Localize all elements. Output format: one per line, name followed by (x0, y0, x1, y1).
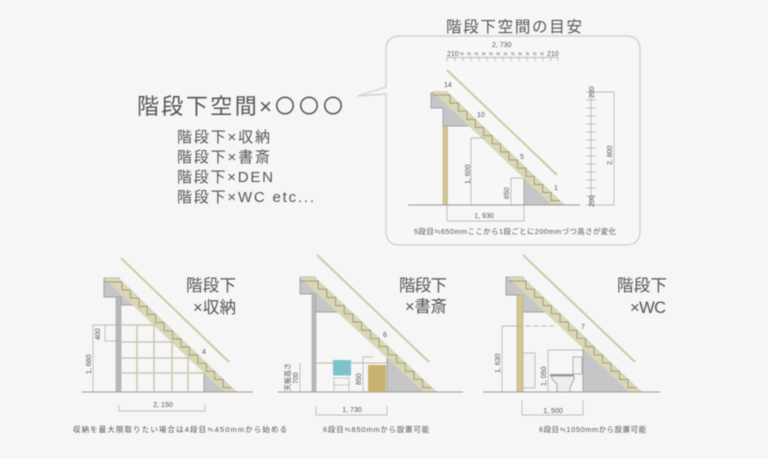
step numbers: 10 (477, 112, 485, 119)
desk and chair (316, 360, 387, 392)
step numbers: 5 (520, 154, 524, 161)
height dimensions: 1, 630 (495, 353, 502, 373)
step number: 7 (581, 324, 585, 331)
stair section (82, 258, 253, 392)
main heading: 〇〇〇 (275, 95, 343, 118)
desk height dimensions: 700 (293, 372, 300, 384)
width dimension (316, 406, 387, 415)
panel title: 階段下空間の目安 (446, 18, 582, 36)
width dimension 2,730 (447, 42, 559, 61)
stair section (483, 255, 660, 392)
step numbers (444, 82, 558, 192)
study heading (399, 276, 447, 316)
clearance dimensions (465, 138, 523, 205)
list of under-stair uses (177, 129, 314, 206)
panel: study under stairs (278, 255, 463, 434)
width dimension: 2, 150 (153, 402, 173, 409)
width dimension: 1, 500 (543, 408, 563, 415)
study caption: 6段目≒850mmから設置可能 (323, 425, 430, 434)
step numbers: 1 (554, 185, 558, 192)
width dimension (119, 402, 205, 411)
WC heading: ×WC (630, 299, 666, 317)
step numbers: 14 (444, 82, 452, 89)
storage heading: ×収納 (193, 298, 236, 317)
stair section (278, 255, 463, 392)
height dimension 2,800: 200 (589, 195, 596, 207)
height dimension 2,800: 2, 800 (607, 145, 614, 165)
list of under-stair uses: 階段下×WC etc... (177, 189, 314, 206)
storage caption: 収納を最大限取りたい場合は4段目≒450mmから始める (73, 425, 287, 434)
WC heading: 階段下 (617, 276, 667, 295)
list of under-stair uses: 階段下×書斎 (177, 149, 270, 166)
width dimension 2,730: 210 (547, 51, 559, 58)
step number: 4 (202, 349, 206, 356)
height dimension 2,800: 200 (589, 86, 596, 98)
width dimension: 1, 730 (342, 407, 362, 414)
height dimension 2,800 (586, 86, 614, 207)
list of under-stair uses: 階段下×収納 (177, 129, 270, 146)
storage grid shelves (121, 325, 204, 392)
study heading: 階段下 (399, 276, 447, 295)
study heading: ×書斎 (405, 297, 447, 316)
width dimension 2,730: 2, 730 (492, 42, 512, 49)
width dimension 2,730: 210 (447, 51, 459, 58)
storage heading: 階段下 (186, 276, 236, 295)
storage heading (186, 276, 236, 317)
toilet and sink (523, 353, 582, 392)
height dimensions: 1, 050 (541, 366, 548, 386)
WC heading (617, 276, 667, 317)
WC caption: 6段目≒1050mmから設置可能 (539, 425, 647, 434)
panel: storage under stairs (73, 258, 287, 434)
clearance dimensions: 650 (504, 187, 511, 199)
guide caption: 5段目≒650mmここから1段ごとに200mmづつ高さが変化 (414, 227, 617, 236)
height dimensions (86, 325, 121, 392)
step number: 6 (383, 332, 387, 339)
stair section drawing (408, 70, 580, 205)
desk height dimensions: 天板高さ (283, 363, 292, 391)
desk height dimensions (283, 357, 373, 392)
main heading: 階段下空間× (137, 94, 272, 119)
width dimension 2,730: ≈≈≈≈≈≈≈≈≈≈≈≈ (460, 51, 544, 58)
width dimension 1,930 (447, 205, 524, 221)
clearance dimensions: 1, 600 (465, 164, 472, 184)
width dimension 1,930: 1, 930 (474, 213, 494, 220)
list of under-stair uses: 階段下×DEN (177, 169, 273, 186)
height dimensions: 400 (95, 328, 102, 340)
height dimensions: 1, 680 (86, 354, 93, 374)
height dimensions (495, 326, 583, 392)
main heading (137, 94, 343, 119)
width dimension (522, 400, 583, 415)
desk height dimensions: 850 (356, 373, 363, 385)
panel: WC under stairs (483, 255, 667, 434)
callout bubble with tail (358, 36, 640, 245)
panel: under-stair space guide (358, 18, 640, 245)
